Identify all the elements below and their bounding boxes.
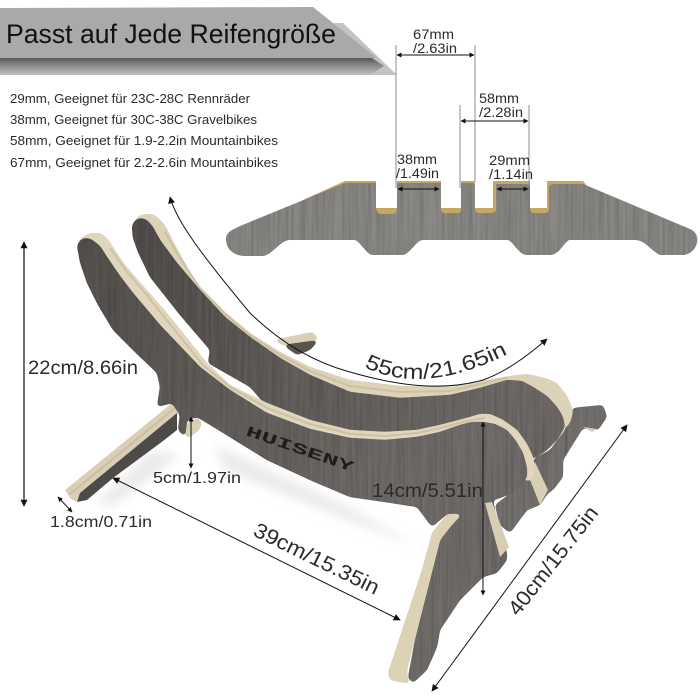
title banner — [0, 7, 397, 75]
stand dimension labels: 39cm/15.35in — [250, 519, 383, 600]
plate dimension labels: 67mm — [413, 26, 454, 42]
plate dimension labels: 58mm — [479, 90, 519, 106]
stand dimension labels: 40cm/15.75in — [504, 502, 603, 620]
plate dimension labels: /1.14in — [489, 166, 533, 182]
plate dimension lines — [396, 45, 529, 188]
tire size list: 67mm, Geeignet für 2.2-2.6in Mountainbikes — [10, 155, 279, 170]
slotted plate — [226, 181, 697, 256]
stand dimension labels: 55cm/21.65in — [366, 346, 506, 380]
tire size list: 29mm, Geeignet für 23C-28C Rennräder — [10, 91, 251, 106]
stand dimension labels: 5cm/1.97in — [153, 470, 241, 487]
ground shadows — [95, 445, 415, 545]
plate dimension labels: /1.49in — [396, 165, 439, 181]
front panel — [77, 233, 535, 683]
stand dimension labels: 1.8cm/0.71in — [50, 514, 152, 531]
back right foot — [495, 405, 607, 533]
tire size list: 58mm, Geeignet für 1.9-2.2in Mountainbikes — [10, 133, 279, 148]
plate dimension labels: 29mm — [489, 152, 530, 168]
back left foot — [273, 332, 319, 355]
plate dimension labels: /2.28in — [479, 104, 523, 120]
plate dimension labels: /2.63in — [413, 40, 457, 56]
height arrow — [23, 242, 25, 506]
tire size list — [10, 91, 279, 170]
stand dimension labels — [28, 346, 603, 620]
left leg — [65, 403, 202, 502]
front right leg edge — [388, 502, 509, 683]
stand dimension labels: 14cm/5.51in — [372, 481, 483, 502]
stand arrows — [58, 197, 627, 691]
stand — [65, 214, 607, 683]
title: Passt auf Jede Reifengröße — [6, 19, 336, 49]
plate dimension labels — [396, 26, 533, 182]
brand name: HUISENY — [243, 424, 356, 477]
plate dimension labels: 38mm — [397, 151, 437, 167]
stand dimension labels: 22cm/8.66in — [28, 358, 138, 379]
tire size list: 38mm, Geeignet für 30C-38C Gravelbikes — [10, 112, 257, 127]
back panel — [132, 214, 573, 458]
plate arrows — [397, 55, 528, 189]
